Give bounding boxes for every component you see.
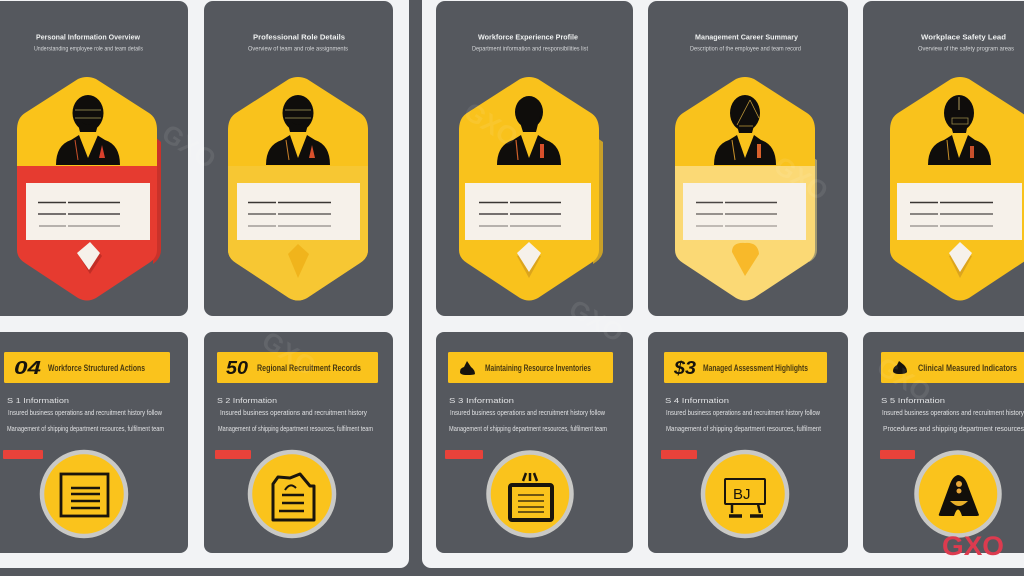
icon: pouch (460, 361, 475, 375)
red tag 3 (445, 450, 483, 459)
header label 3: Maintaining Resource Inventories (485, 363, 591, 374)
number 2: 50 (226, 358, 248, 378)
red tag 5 (880, 450, 915, 459)
text box (26, 183, 150, 240)
icon: person (56, 95, 120, 165)
card 4 subheading: Description of the employee and team record (690, 46, 801, 52)
icon: pouch (893, 361, 907, 374)
info card 2 (204, 332, 393, 553)
body text 4 (665, 396, 822, 433)
header label 1: Workforce Structured Actions (48, 363, 145, 374)
body text 1: Management of shipping department resources, fulfilment team (7, 424, 164, 433)
body text 4: S 4 Information (665, 396, 729, 405)
text box (897, 183, 1022, 240)
icon badge: warning triangle (916, 452, 1000, 536)
body text 2: S 2 Information (217, 396, 277, 405)
icon: person (497, 96, 561, 165)
body text 2 (217, 396, 373, 433)
pointer diamond (949, 250, 972, 278)
text box (683, 183, 806, 240)
watermark: GXO 2: GXO (459, 96, 524, 153)
watermark: GXO 6: GXO (872, 351, 937, 408)
icon: person (714, 95, 776, 165)
yellow header bar 2 (217, 352, 378, 383)
body text 1 (7, 396, 164, 433)
info card 4 (648, 332, 848, 553)
red tag 2 (215, 450, 251, 459)
card 1 hexagon badge (17, 70, 161, 306)
body text 5: S 5 Information (881, 396, 945, 405)
text box (237, 183, 360, 240)
card 1 subheading: Understanding employee role and team details (34, 46, 144, 52)
card 5 subheading: Overview of the safety program areas (918, 46, 1015, 52)
yellow header bar 3 (448, 352, 613, 383)
card 3 subheading: Department information and responsibilities list (472, 46, 588, 52)
logo: red GXO: GXO (942, 531, 1004, 561)
body text 3: Management of shipping department resources, fulfilment team (449, 424, 607, 433)
card 3 hexagon badge (459, 70, 603, 310)
yellow header bar 1 (4, 352, 170, 383)
watermark: GXO 5: GXO (257, 325, 322, 382)
card 2 subheading: Overview of team and role assignments (248, 46, 349, 52)
profile card 1 (0, 1, 188, 316)
icon badge: document list (42, 452, 126, 536)
body text 3: S 3 Information (449, 396, 514, 405)
card 5 hexagon badge (890, 70, 1024, 310)
info card 5 (863, 332, 1024, 553)
icon badge: monitor (703, 452, 787, 536)
pointer diamond (288, 244, 309, 278)
icon badge: folder (250, 452, 334, 536)
text box (465, 183, 591, 240)
watermark: GXO 1: GXO (157, 118, 222, 175)
red tag 1 (3, 450, 43, 459)
card 2 heading: Professional Role Details (253, 32, 345, 42)
body text 3 (449, 396, 607, 433)
icon: person (928, 95, 991, 165)
body text 2: Management of shipping department resources, fulfilment team (218, 424, 373, 433)
icon: person (266, 95, 330, 165)
pointer diamond (517, 250, 541, 278)
header label 2: Regional Recruitment Records (257, 363, 361, 374)
profile card 4 (648, 1, 848, 316)
profile card 2 (204, 1, 393, 316)
card 4 hexagon badge (675, 70, 817, 306)
number 4: $3 (673, 358, 696, 378)
header label 4: Managed Assessment Highlights (703, 363, 808, 374)
card 5 heading: Workplace Safety Lead (921, 32, 1006, 42)
icon badge: monitor: BJ (733, 486, 751, 503)
watermark: GXO 3: GXO (564, 293, 629, 348)
body text 2: Insured business operations and recruitment history (220, 408, 367, 417)
watermark: GXO 4: GXO (769, 150, 834, 207)
panel: right sheet (422, 0, 1024, 568)
red tag 4 (661, 450, 697, 459)
pointer diamond (79, 244, 102, 274)
body text 1: S 1 Information (7, 396, 69, 405)
info card 1 (0, 332, 188, 553)
card 3 heading: Workforce Experience Profile (478, 32, 578, 42)
body text 1: Insured business operations and recruitment history follow (8, 408, 162, 417)
profile card 5 (863, 1, 1024, 316)
number 1: 04 (14, 358, 41, 378)
body text 3: Insured business operations and recruitment history follow (450, 408, 605, 417)
body text 5 (881, 396, 1024, 433)
icon badge: clipboard (488, 452, 572, 536)
panel: left sheet (0, 0, 409, 568)
profile card 3 (436, 1, 633, 316)
card 4 heading: Management Career Summary (695, 32, 799, 42)
pointer diamond (732, 243, 759, 276)
info card 3 (436, 332, 633, 553)
yellow header bar 4 (664, 352, 827, 383)
card 1 heading: Personal Information Overview (36, 32, 140, 42)
card 2 hexagon badge (228, 70, 368, 310)
body text 4: Insured business operations and recruitment history follow (666, 408, 820, 417)
yellow header bar 5 (881, 352, 1024, 383)
body text 4: Management of shipping department resources, fulfilment (666, 424, 822, 433)
